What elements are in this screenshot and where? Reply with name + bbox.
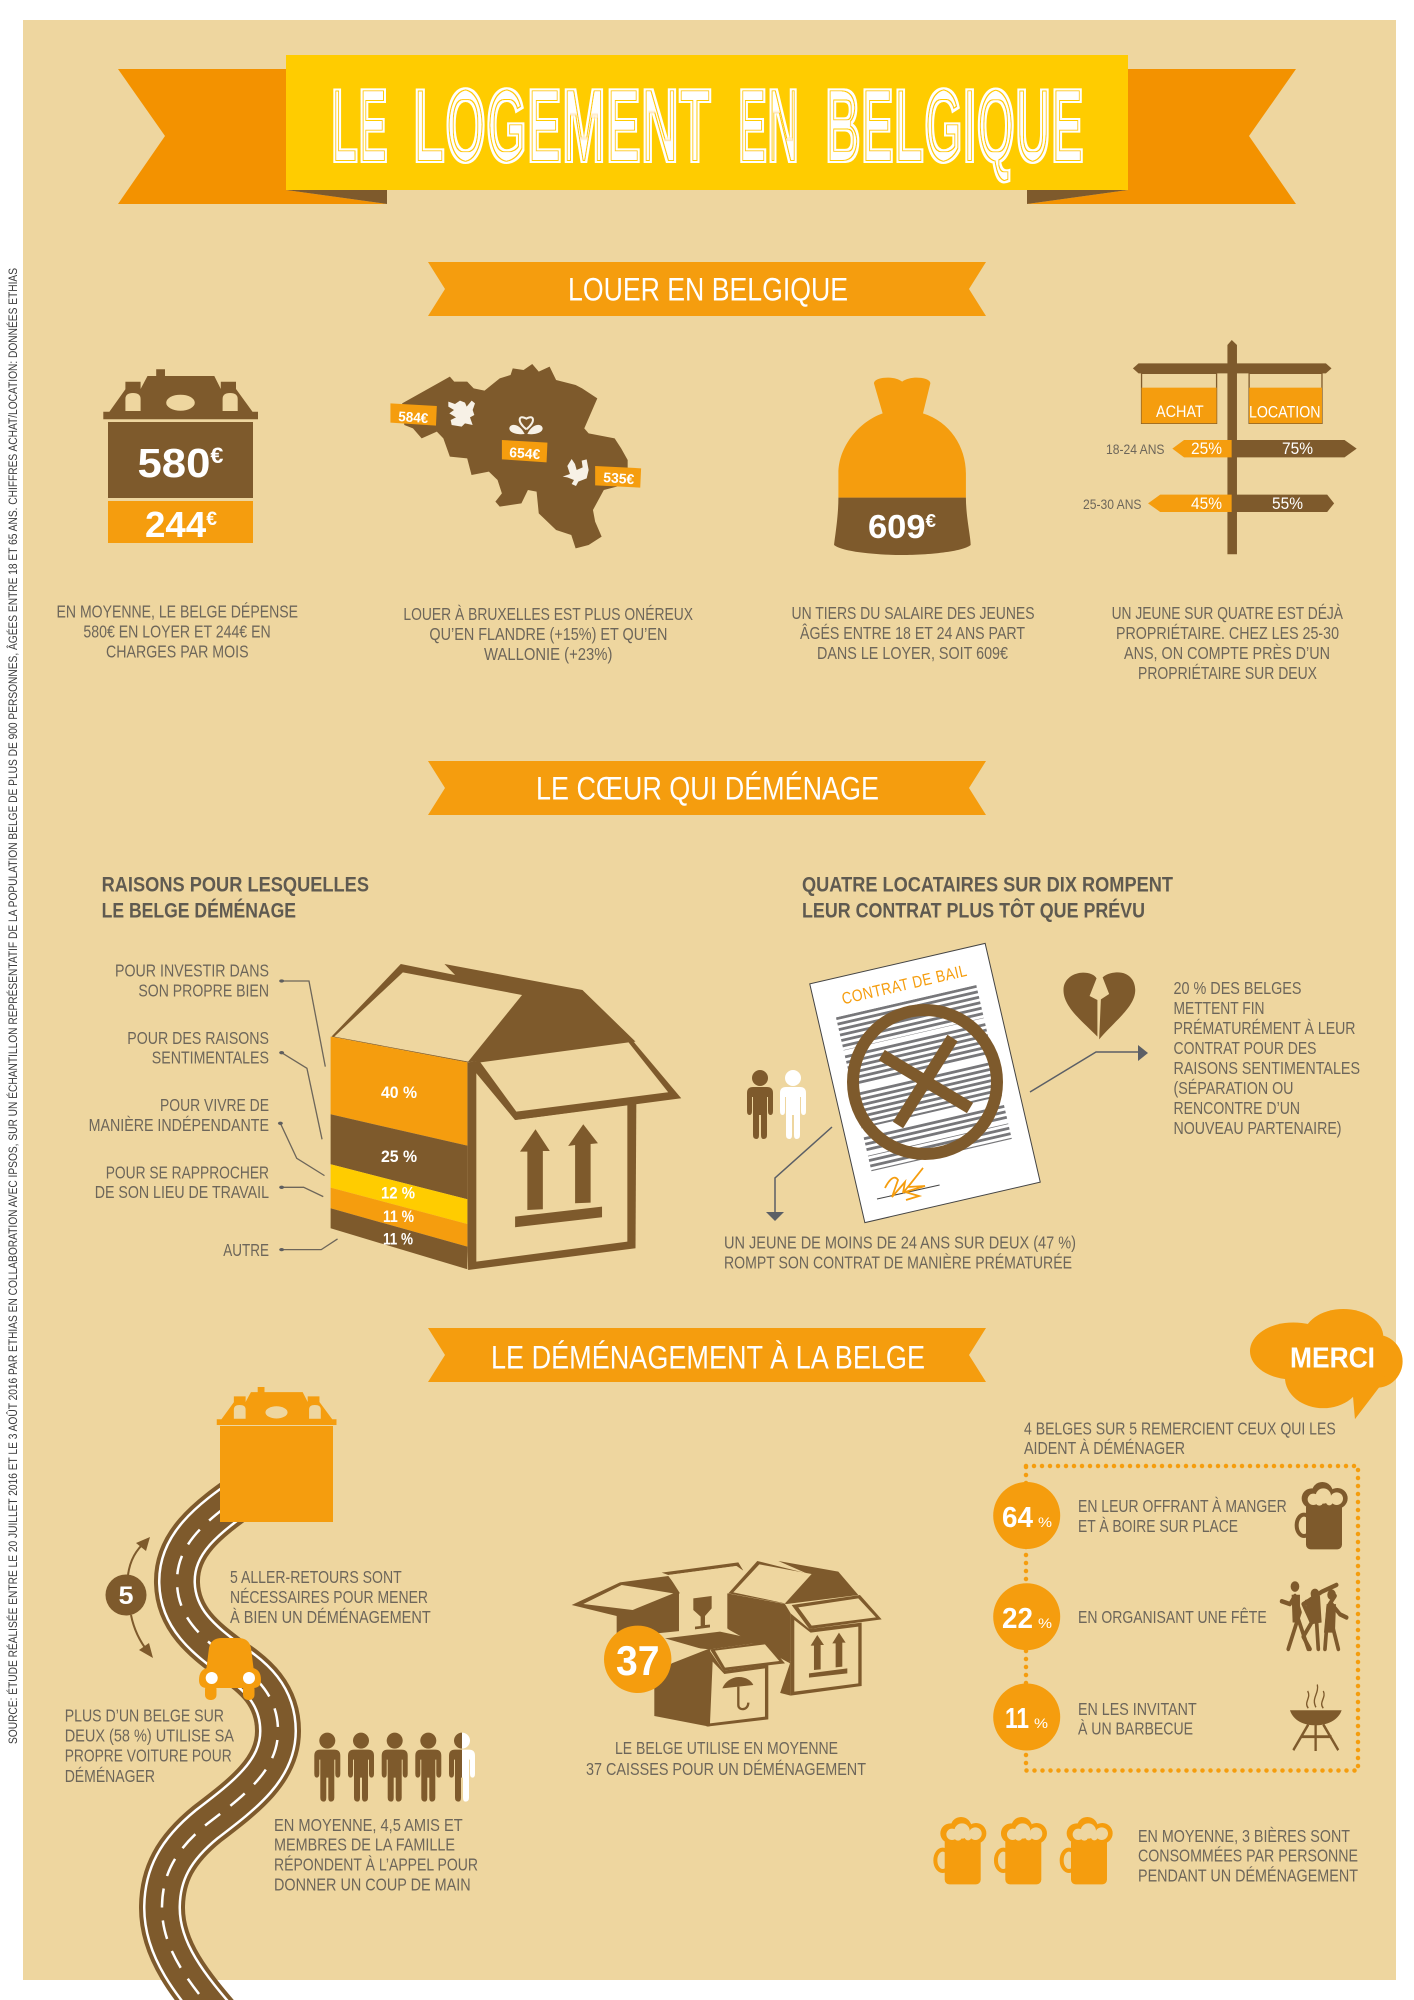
pictogram: 4.5 people [314,1733,475,1802]
icon: orange house [217,1387,336,1522]
text: round trips [230,1567,431,1627]
text: young people break contract [724,1233,1076,1273]
road [162,1490,278,2000]
text: youth salary: DANS LE LOYER, SOIT 609€ [817,643,1008,663]
signpost: buy versus rent: 75% [1282,440,1313,458]
text: sentimental reasons: NOUVEAU PARTENAIRE) [1174,1118,1342,1138]
icon: car [199,1638,261,1700]
stat: 64% [993,1482,1060,1549]
icon: three moving boxes [572,1561,882,1727]
text: average rent [56,602,298,662]
signpost: buy versus rent: 45% [1191,495,1222,513]
callout: merci: MERCI [1290,1342,1375,1374]
heading: reasons for moving: LE BELGE DÉMÉNAGE [102,900,296,922]
reason labels: SON PROPRE BIEN [138,981,269,1001]
text: sentimental reasons: (SÉPARATION OU [1174,1078,1294,1098]
title banner: BELGIQUE [825,68,1084,184]
stat: 64%: % [1038,1514,1052,1530]
icon: three orange beer mugs [935,1817,1113,1884]
badge: 37 [604,1626,671,1693]
text: helpers: DONNER UN COUP DE MAIN [274,1875,471,1895]
heading: reasons for moving [102,874,369,922]
connector lines [280,981,338,1250]
icon: dancers [1282,1581,1347,1649]
text: sentimental reasons: 20 % DES BELGES [1174,978,1302,998]
text: thanks intro: AIDENT À DÉMÉNAGER [1024,1438,1185,1458]
signpost: buy versus rent: 18-24 ANS [1106,442,1164,457]
text: food and drink: ET À BOIRE SUR PLACE [1078,1516,1238,1536]
heading: early contract breaks: LEUR CONTRAT PLUS TÔT QUE PRÉVU [802,898,1145,922]
text: beers: PENDANT UN DÉMÉNAGEMENT [1138,1866,1358,1886]
text: young owners: PROPRIÉTAIRE SUR DEUX [1138,663,1317,683]
charges amount: € [206,509,217,530]
reason labels: SENTIMENTALES [152,1048,269,1068]
reason labels: POUR SE RAPPROCHER [106,1163,269,1183]
icon: two people [747,1070,806,1139]
text: sentimental reasons: PRÉMATURÉMENT À LEUR [1174,1018,1356,1038]
chart: moving box with percentages: 11 % [383,1207,414,1226]
chart: moving box with percentages: 40 % [381,1083,417,1102]
arrow: to young renters [766,1127,832,1221]
text: sentimental reasons [1174,978,1360,1138]
section banner: le coeur qui déménage: LE CŒUR QUI DÉMÉNAGE [536,770,879,806]
text: young people break contract: ROMPT SON CONTRAT DE MANIÈRE PRÉMATURÉE [724,1253,1072,1273]
text: average rent: EN MOYENNE, LE BELGE DÉPENSE [56,602,298,622]
chart: moving box with percentages [278,964,681,1270]
text: sentimental reasons: RENCONTRE D’UN [1174,1098,1300,1118]
section banner: louer en Belgique: LOUER EN BELGIQUE [568,272,848,308]
source note: SOURCE: ÉTUDE RÉALISÉE ENTRE LE 20 JUILLET 2016 ET LE 3 AOÛT 2016 PAR ETHIAS EN COLLABORATION AVEC IPSOS, SUR UN ÉCHANTILLON REPRÉSENTATIF DE LA POPULATION BELGE DE PLUS DE 900 PERSONNES, ÂGÉES ENTRE 18 ET 65 ANS. CHIFFRES ACHAT/LOCATION: DONNÉES ETHIAS [7,268,20,1744]
heading: early contract breaks [802,874,1173,922]
icon: house with rent and charges [103,369,258,545]
heading: early contract breaks: QUATRE LOCATAIRES SUR DIX ROMPENT [802,874,1173,896]
text: average rent: 580€ EN LOYER ET 244€ EN [83,622,271,642]
text: barbecue [1078,1699,1197,1739]
stat: 11% [993,1684,1060,1750]
text: food and drink: EN LEUR OFFRANT À MANGER [1078,1496,1287,1516]
icon: beer mug [1297,1482,1348,1549]
chart: moving box with percentages: 25 % [381,1147,417,1166]
text: young owners [1112,603,1343,683]
arrow: to sentimental reasons [1030,1045,1148,1092]
callout: merci [1250,1309,1403,1419]
section banner: le coeur qui déménage [428,761,986,815]
text: 37 boxes: 37 CAISSES POUR UN DÉMÉNAGEMENT [586,1759,866,1779]
text: beers: EN MOYENNE, 3 BIÈRES SONT [1138,1826,1350,1846]
icon: money bag: € [926,511,936,531]
text: Brussels comparison: LOUER À BRUXELLES EST PLUS ONÉREUX [403,604,693,624]
text: barbecue: EN LES INVITANT [1078,1699,1197,1719]
label: Flanders: 584€ [398,408,429,426]
text: own car: DÉMÉNAGER [65,1766,155,1786]
text: round trips: À BIEN UN DÉMÉNAGEMENT [230,1607,431,1627]
text: own car [65,1706,234,1786]
reason labels: AUTRE [223,1240,269,1260]
text: young owners: UN JEUNE SUR QUATRE EST DÉJÀ [1112,603,1343,623]
signpost: buy versus rent: 55% [1272,495,1303,513]
text: beers: CONSOMMÉES PAR PERSONNE [1138,1846,1358,1866]
charges amount: 244 [145,504,205,545]
title banner [118,55,1296,204]
stat: 22%: 22 [1002,1603,1033,1635]
stat: 11%: 11 [1005,1703,1029,1735]
signpost: buy versus rent [1083,340,1357,554]
text: own car: PROPRE VOITURE POUR [65,1746,232,1766]
reason labels: MANIÈRE INDÉPENDANTE [89,1115,269,1135]
text: young people break contract: UN JEUNE DE MOINS DE 24 ANS SUR DEUX (47 %) [724,1233,1076,1253]
signpost: buy versus rent: 25% [1191,440,1222,458]
text: youth salary: UN TIERS DU SALAIRE DES JEUNES [792,603,1034,623]
signpost: buy versus rent: LOCATION [1249,404,1320,422]
text: helpers: RÉPONDENT À L’APPEL POUR [274,1855,478,1875]
heading: reasons for moving: RAISONS POUR LESQUELLES [102,874,369,896]
icon: broken heart [1063,972,1135,1039]
reason labels: POUR VIVRE DE [160,1095,269,1115]
section banner: le déménagement à la belge [428,1328,986,1382]
text: own car: PLUS D’UN BELGE SUR [65,1706,224,1726]
text: thanks intro: 4 BELGES SUR 5 REMERCIENT CEUX QUI LES [1024,1419,1336,1439]
icon: money bag: 609 [868,508,923,545]
text: Brussels comparison: WALLONIE (+23%) [484,644,612,664]
text: round trips: 5 ALLER-RETOURS SONT [230,1567,402,1587]
text: thanks intro [1024,1419,1336,1458]
label: Brussels: 654€ [509,444,541,462]
chart: moving box with percentages: 12 % [381,1184,415,1202]
text: helpers [274,1815,478,1895]
icon: five round trips: 5 [118,1582,134,1610]
text: Brussels comparison [403,604,693,664]
map of Belgium with regional rents [390,364,641,548]
text: helpers: EN MOYENNE, 4,5 AMIS ET [274,1815,463,1835]
signpost: buy versus rent: ACHAT [1156,403,1204,421]
icon: five round trips [106,1537,153,1658]
text: youth salary [792,603,1034,663]
text: food and drink [1078,1496,1287,1536]
title: LOGEMENT [413,68,711,184]
rent amount: € [210,443,223,468]
text: young owners: ANS, ON COMPTE PRÈS D’UN [1124,643,1330,663]
reason labels [89,961,269,1260]
icon: barbecue [1290,1684,1342,1751]
reason labels: POUR INVESTIR DANS [115,961,269,981]
rent amount: 580 [138,440,206,486]
title: LE [331,68,388,184]
text: Brussels comparison: QU’EN FLANDRE (+15%) ET QU’EN [429,624,667,644]
text: round trips: NÉCESSAIRES POUR MENER [230,1587,428,1607]
text: beers [1138,1826,1358,1886]
section banner: louer en Belgique [428,262,986,316]
contract title: CONTRAT DE BAIL [840,962,969,1008]
stat: 22% [993,1583,1060,1650]
stat: 64%: 64 [1002,1502,1033,1534]
icon: money bag [834,378,971,555]
text: youth salary: ÂGÉS ENTRE 18 ET 24 ANS PART [800,623,1025,643]
stat: 11%: % [1034,1715,1048,1731]
text: own car: DEUX (58 %) UTILISE SA [65,1726,234,1746]
text: average rent: CHARGES PAR MOIS [106,642,249,662]
contract document with cross [810,943,1040,1223]
text: sentimental reasons: METTENT FIN [1174,998,1264,1018]
text: 37 boxes [586,1738,866,1779]
text: barbecue: À UN BARBECUE [1078,1719,1193,1739]
text: helpers: MEMBRES DE LA FAMILLE [274,1834,455,1854]
icons: regional emblems [448,401,589,486]
text: party: EN ORGANISANT UNE FÊTE [1078,1607,1267,1627]
reason labels: POUR DES RAISONS [127,1028,269,1048]
text: 37 boxes: LE BELGE UTILISE EN MOYENNE [615,1738,838,1758]
chart: moving box with percentages: 11 % [383,1230,413,1248]
section banner: le déménagement à la belge: LE DÉMÉNAGEMENT À LA BELGE [491,1340,925,1376]
dotted frame [1026,1466,1358,1770]
label: Wallonia: 535€ [603,469,635,487]
title: EN [738,68,799,184]
text: young owners: PROPRIÉTAIRE. CHEZ LES 25-30 [1116,623,1339,643]
reason labels: DE SON LIEU DE TRAVAIL [95,1182,269,1202]
signpost: buy versus rent: 25-30 ANS [1083,497,1142,512]
text: sentimental reasons: CONTRAT POUR DES [1174,1038,1316,1058]
stat: 22%: % [1038,1615,1052,1631]
text: sentimental reasons: RAISONS SENTIMENTALES [1174,1058,1360,1078]
badge: 37: 37 [616,1637,660,1684]
